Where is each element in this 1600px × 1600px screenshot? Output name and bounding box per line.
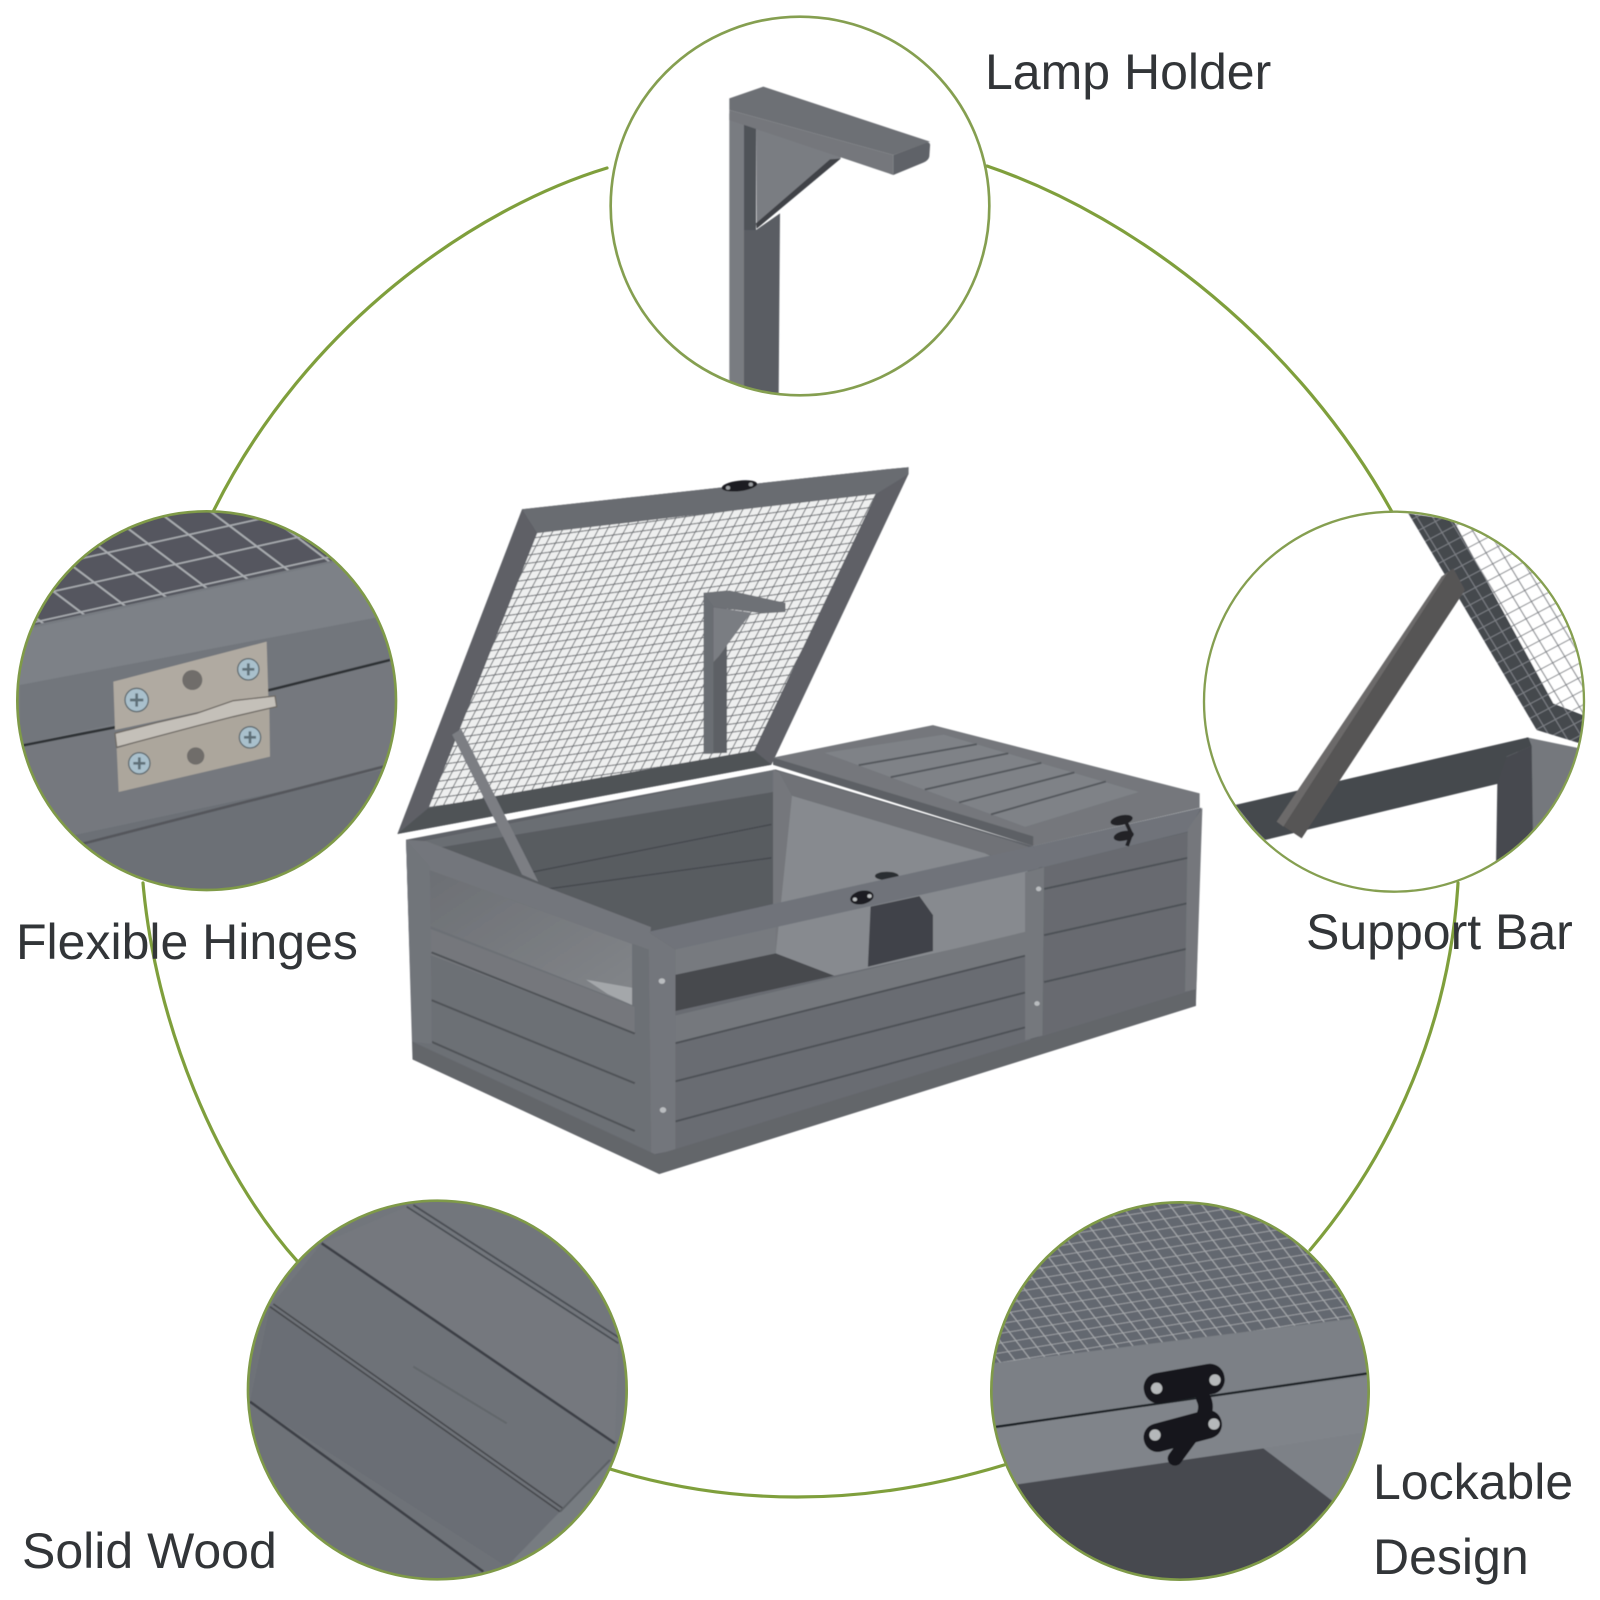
label: support bar: Support Bar	[1306, 904, 1573, 960]
circle outline	[991, 1202, 1369, 1580]
support bar close-up	[1235, 513, 1600, 867]
main product: tortoise house with open mesh lid	[397, 467, 1202, 1174]
left side panel	[406, 840, 651, 1154]
circle outline	[17, 511, 396, 890]
hinge plates	[113, 642, 268, 730]
lamp holder bracket	[729, 87, 930, 397]
label: lamp holder: Lamp Holder	[985, 44, 1271, 100]
lamp holder seen through mesh	[704, 590, 785, 754]
screws	[659, 887, 1041, 1113]
hinge close-up	[24, 512, 390, 888]
inner partition	[675, 770, 1033, 1018]
circle outline	[1204, 512, 1584, 892]
panel: lockable design detail	[980, 1190, 1380, 1590]
label: flexible hinges: Flexible Hinges	[16, 914, 358, 970]
box back rail and inner wall	[423, 770, 778, 934]
black swing latch	[1143, 1363, 1226, 1404]
green connecting ring	[143, 166, 1458, 1497]
panel: support bar detail	[1204, 512, 1600, 892]
plank lid over hide	[773, 725, 1200, 846]
lid frame	[397, 467, 909, 834]
lid wire mesh	[429, 494, 876, 808]
latch close-up	[995, 1204, 1367, 1578]
label: solid wood: Solid Wood	[22, 1523, 277, 1579]
label: lockable design: Lockable	[1373, 1454, 1573, 1510]
panel: lamp holder detail	[611, 17, 989, 397]
support bar	[452, 729, 538, 882]
right compartment panel	[1025, 808, 1202, 1040]
small latches	[848, 813, 1135, 907]
tortoise door	[868, 896, 933, 967]
box body backing	[406, 770, 1201, 1174]
wood planks close-up	[250, 1204, 619, 1572]
front long panel	[648, 846, 1044, 1155]
label: lockable design	[1373, 1454, 1573, 1585]
panel: solid wood detail	[240, 1201, 640, 1590]
base strip	[413, 989, 1196, 1174]
panel: flexible hinges detail	[16, 510, 398, 892]
lid latch	[721, 479, 758, 493]
label: lockable design: Design	[1373, 1529, 1529, 1585]
circle outline	[248, 1201, 627, 1579]
circle outline	[611, 17, 989, 395]
